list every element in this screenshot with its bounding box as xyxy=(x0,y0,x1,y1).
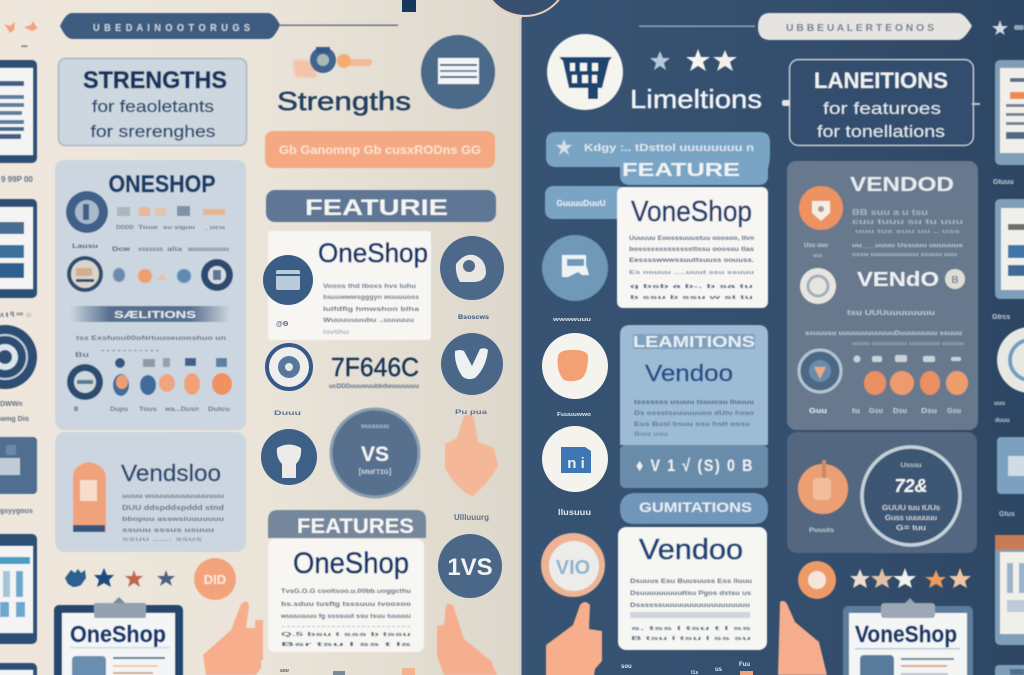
caption: Puuuts xyxy=(809,528,835,534)
icon: blue square circle xyxy=(542,426,608,492)
body text: lovtihu xyxy=(323,329,349,336)
heading: VENDOD xyxy=(850,174,954,196)
body text: bsuuwwwsgggyn wuuuuoss xyxy=(323,294,419,301)
icon: small badge xyxy=(945,269,965,289)
small labels row 1: DDDD xyxy=(116,225,134,231)
small labels row 3: ........... xyxy=(100,347,162,353)
heading: Limeltions xyxy=(630,84,762,114)
gauge: Usssu xyxy=(900,463,922,469)
card: OneShop xyxy=(268,231,431,340)
small labels row 4 xyxy=(74,407,230,413)
brand: OneShop xyxy=(318,238,428,268)
body text: q bsb a b-. b sa tu xyxy=(630,284,753,290)
brand: VoneShop xyxy=(631,196,752,228)
labels: Dsu xyxy=(921,408,937,415)
limitations bar: GUMITATIONS xyxy=(639,499,752,515)
orange tokens xyxy=(864,371,968,395)
hand: bottom middle-left xyxy=(437,604,497,675)
panel: OneShop features xyxy=(55,160,246,430)
caption: Bsoscws xyxy=(458,315,490,321)
icon: ring circle xyxy=(0,325,37,389)
card: VoneShop xyxy=(617,187,768,308)
device 3 xyxy=(995,535,1024,645)
icon row 1 xyxy=(117,206,225,216)
small labels row 2: alia xyxy=(167,247,183,253)
connector line xyxy=(280,24,398,26)
heading: Strengths xyxy=(277,86,411,116)
body text xyxy=(629,235,754,301)
badge: 1VS: 1VS xyxy=(447,554,493,581)
body text: .......................... xyxy=(281,623,413,629)
icon: cart circle xyxy=(547,34,623,110)
text bars xyxy=(113,657,165,674)
small labels row 4: Tous xyxy=(139,407,158,413)
label pill xyxy=(545,186,625,219)
middle-left: strengths title block xyxy=(277,35,495,116)
label pill: GuuuuDuuU xyxy=(556,199,606,208)
icon: star xyxy=(556,139,572,155)
brand: VoneShop xyxy=(855,621,957,647)
clip xyxy=(94,597,146,618)
body text: Dssssssuuuuuuuuuuuuuuuuuu xyxy=(630,602,750,609)
gauge xyxy=(862,447,960,545)
header band: limitations: U B B E U A L E R T E O N O S xyxy=(786,23,934,34)
caption: Gtus xyxy=(999,511,1015,518)
caption: ᴍmg Dio xyxy=(0,416,29,423)
small labels: sssu uuuuuuuuuuu ssuuu uuu xyxy=(852,252,957,258)
faded bar xyxy=(630,612,750,618)
device 4 xyxy=(0,663,37,675)
badge: orange circle xyxy=(194,558,236,600)
header band: strengths xyxy=(60,13,398,39)
labels xyxy=(631,626,752,642)
icon: orange blob circle xyxy=(542,333,608,399)
code label: 7F646C xyxy=(331,352,419,382)
caption: llusuuu xyxy=(558,508,591,517)
icon: box circle xyxy=(263,255,313,305)
body text: b ssu b ssu w st tu xyxy=(630,295,753,301)
features bar 2 xyxy=(268,510,426,538)
clip xyxy=(881,598,935,618)
heading: LANEITIONS xyxy=(814,68,948,93)
icon: small badge: B xyxy=(951,275,959,286)
labels: tu xyxy=(852,408,860,415)
pins xyxy=(782,100,790,106)
heading: ONESHOP xyxy=(108,171,216,198)
caption: DWWn xyxy=(0,401,23,408)
gauge: G= tuu xyxy=(896,525,926,532)
body text: TvsG.O.G cooltsoo.u.00bb.uoggcthu xyxy=(281,589,411,595)
icon: bulb circle xyxy=(261,429,317,485)
caption: Pu pua xyxy=(455,410,488,416)
small labels row 2 xyxy=(72,244,229,253)
body text: Es oouuu .....uuut ssu ssuuu xyxy=(629,270,754,276)
body text: ssuu ...... ssus xyxy=(122,537,203,543)
icon: ring circle xyxy=(997,327,1024,393)
heading: STRENGTHS xyxy=(83,67,227,94)
icon: orange circle xyxy=(799,186,843,230)
mini data grid xyxy=(852,208,963,226)
labels: B tsu l tsu l ss su xyxy=(631,636,751,642)
small labels: Usu uuu xyxy=(804,243,828,249)
caption: wwwwuuu xyxy=(551,317,591,323)
body text: DUU ddspddspddd stnd xyxy=(122,505,224,512)
device 4 xyxy=(995,665,1024,675)
badge: orange circle xyxy=(798,561,836,599)
hand: far thumb xyxy=(255,620,263,660)
body text: bs.sduu tusftg tsssuuu tvooxoo xyxy=(281,602,411,608)
badge: VS: [ᴍʉrᴛɪɢ] xyxy=(358,467,392,476)
icon: V circle xyxy=(441,333,503,395)
orange banner: Gb Ganomnp Gb cusxRODns GG xyxy=(279,143,481,157)
bottom mini labels: sᴏu xyxy=(621,664,632,670)
panel: strengths summary xyxy=(58,58,246,146)
caption: 9 99P 00 xyxy=(1,175,33,184)
small labels xyxy=(804,243,963,259)
caption: Ullluuurg xyxy=(454,513,489,522)
body text: ssuuu sssus usuuu xyxy=(122,528,215,534)
right strip: devices and icons xyxy=(992,20,1024,675)
stars xyxy=(650,49,737,71)
small labels row 2: Lausu xyxy=(72,244,98,250)
badge: orange circle: DID xyxy=(204,572,226,587)
small labels row 2: wuuuuuuuuuu xyxy=(187,247,229,253)
mini icon row xyxy=(115,358,227,368)
brand: Vendoo xyxy=(639,534,743,566)
panel: Vendoo summary xyxy=(55,432,246,552)
mini data grid: BB suu a u tsu xyxy=(852,208,928,217)
hand: far right-center xyxy=(778,601,827,675)
small tile xyxy=(997,437,1024,494)
body text: uuuu wuuuuuuuuuuuuuu xyxy=(122,494,224,500)
thumbnail xyxy=(72,656,106,675)
device 3 xyxy=(0,534,37,644)
body text: Dsuuuuuuuuuttsu Pgos dstsu us xyxy=(630,590,751,597)
mini data grid: cuu tuuu su tu uuu xyxy=(852,219,963,226)
thumbnail xyxy=(860,655,894,675)
subheading lines: for featuroes xyxy=(823,99,941,118)
icon: ring pin xyxy=(799,350,841,392)
left strip: devices and icons xyxy=(0,21,38,675)
header: LEAMITIONS xyxy=(633,334,755,351)
clipboard: VoneShop xyxy=(843,598,973,675)
caption: Fuuuuwwo xyxy=(557,412,591,418)
subheading lines xyxy=(817,99,945,141)
subheading lines: for srerenghes xyxy=(90,122,216,141)
icon: laptop circle xyxy=(69,258,101,290)
bottom mini labels xyxy=(621,662,753,675)
labels: Gsu xyxy=(947,408,961,415)
header band: limitations xyxy=(758,13,972,40)
card: Vendoo white xyxy=(618,527,767,650)
small labels row 1: _ucu xyxy=(203,225,225,231)
body text xyxy=(634,400,754,438)
icon: peach ring circle: VIO xyxy=(556,557,590,579)
center divider xyxy=(519,18,524,675)
header band: strengths: U B E D A I N O O T O R U G S xyxy=(93,23,251,34)
limitations bar xyxy=(620,493,768,524)
orange banner xyxy=(265,131,495,168)
icon: gear and key xyxy=(293,47,372,78)
hand: left xyxy=(203,601,261,675)
badge: VS: wuuuuuu xyxy=(360,424,389,430)
subheading lines: for tonellations xyxy=(817,122,945,141)
icon: large circle xyxy=(66,191,108,233)
icon: peach ring circle xyxy=(541,533,605,597)
top center circle xyxy=(482,0,568,16)
clipboard: OneShop xyxy=(54,597,183,675)
card: OneShop 2 xyxy=(268,539,424,652)
caption: gsyygoʊs xyxy=(0,508,33,515)
body text xyxy=(323,283,420,336)
features bar xyxy=(266,190,496,222)
device 1 xyxy=(995,60,1024,165)
caption: ▪▪▪ xyxy=(21,44,27,50)
panel: Vendoo features: uuuu uuuuuuuu uuuuuuu uuuuu xyxy=(852,341,964,347)
body text: bosssssssssssssttssu ooossu tlas xyxy=(629,246,754,253)
caption: duuu xyxy=(995,418,1010,424)
gauge: Guss uuuuuuu xyxy=(885,515,937,522)
panel: Vendoo features: uuu tus suu uu .. uss xyxy=(855,229,960,235)
caption xyxy=(994,401,1010,424)
brand: OneShop xyxy=(70,621,166,647)
small labels row 2: Dcw xyxy=(112,247,130,253)
top tab marker xyxy=(402,0,416,12)
brand: Vendoo xyxy=(645,360,733,386)
small labels row 3: Bu xyxy=(75,352,89,359)
body text: Bsr tsu l ss t ls xyxy=(281,642,412,648)
banner text: Kdgy :.. tDsttol uuuuuuuu n xyxy=(584,143,754,154)
panel: Vendoo features xyxy=(787,161,978,430)
icon: orange birds xyxy=(4,21,38,33)
footer text: ♦ V 1 √ (S) 0 B xyxy=(636,456,754,475)
small labels row 4: wa...Dusn xyxy=(164,407,199,413)
bottom mini labels: sᴏᴜ xyxy=(280,668,289,674)
small tile xyxy=(0,437,37,494)
gauge: GUUU tuu tUUs xyxy=(882,505,941,512)
body text: Vooos thd tboxs hvs tuhu xyxy=(323,283,416,290)
text lines: tsu UUUuuuuuuuu xyxy=(847,310,935,317)
small labels row 4: Dutcu xyxy=(208,407,230,413)
brand: OneShop xyxy=(293,547,409,580)
badge: VS xyxy=(331,409,419,497)
labels: Guu xyxy=(809,408,827,415)
small labels: uuu xyxy=(813,253,822,259)
body text: Wuuuuuuubu ..uuuuuu xyxy=(323,317,414,324)
small labels row 1: Toue xyxy=(138,225,158,231)
panel: Vendoo stats xyxy=(787,432,977,553)
small labels row 2: sssssss xyxy=(138,247,164,253)
icon: pumpkin hand xyxy=(798,460,848,514)
small labels row 4: B xyxy=(74,407,79,413)
bottom mini labels: Fuu xyxy=(739,662,750,668)
icon row 2 xyxy=(113,268,191,283)
body text: tsssssss usuuu tsuuosu lluuuu xyxy=(634,400,754,406)
labels: Gsu xyxy=(869,408,883,415)
body text: Bws usu xyxy=(634,432,668,438)
small labels row 3 xyxy=(75,347,162,359)
body text: Uuuuuu Eoosssuuustuu ooosoo, tlvn xyxy=(629,235,754,242)
features bar 2: FEATURES xyxy=(297,515,414,538)
small labels: uu___uuuu Ussuuu uuuuuus xyxy=(852,243,963,249)
caption xyxy=(0,401,29,423)
background: strengths side xyxy=(0,0,522,675)
bottom mini labels xyxy=(280,668,415,675)
text line: tsx Exsfuou00oNrtuuoeuooshuo un xyxy=(76,336,226,342)
icon: ring circle xyxy=(267,345,311,389)
small labels row 1 xyxy=(116,225,225,231)
subheading lines xyxy=(90,97,216,141)
connector line xyxy=(639,26,755,27)
background: limitations side xyxy=(522,0,1024,675)
body text: lulfdfig hmwshon blha xyxy=(323,306,420,313)
icon: blue circle xyxy=(542,235,608,301)
body text xyxy=(280,589,413,648)
star rating: strengths xyxy=(65,558,236,600)
device 2 xyxy=(0,199,37,298)
icon: dark circle xyxy=(201,259,233,291)
body text: Eesssswwwssuuttsuuss oouuss. xyxy=(629,257,754,264)
icon: stapler circle xyxy=(440,236,504,300)
mini icons xyxy=(854,355,961,362)
features bar: FEATURIE xyxy=(305,195,448,220)
body text: Ds ossstssuuuuuoo dUtu hsso xyxy=(634,411,754,417)
icon: dark ring xyxy=(67,364,103,400)
body text: Dsuuus Esu Buusuuss Ess lluuu xyxy=(630,578,752,585)
icon: document circle xyxy=(421,35,495,109)
subheading lines: for feaoletants xyxy=(92,97,214,116)
text bars xyxy=(901,658,954,675)
bottom mini labels: us xyxy=(715,667,723,673)
card: Vendoo blue xyxy=(620,325,768,488)
device 1 xyxy=(0,60,37,163)
body text xyxy=(630,578,752,609)
hand: bottom right-center xyxy=(546,602,602,675)
hand: pointing xyxy=(445,415,498,496)
panel: Vendoo features: ssuuusu uuuuuuuuuuuuDuuuuuuuu ssuuu xyxy=(805,331,962,337)
body text: Eus Busi bsuu ssu hstt ossu xyxy=(634,422,750,428)
labels: Dsu xyxy=(893,408,907,415)
small labels row 4: Dupu xyxy=(110,407,128,413)
blue banner xyxy=(546,132,770,185)
caption: Duuu xyxy=(274,411,302,417)
subheading: VENdO xyxy=(857,269,939,291)
body text xyxy=(122,494,224,543)
small labels row 1: su siguu xyxy=(163,225,195,231)
code label: ucDDDuuuwuubbdwuuuuuuu xyxy=(329,384,419,390)
body text: bbopuu asswsiuuuuuuu xyxy=(122,517,224,523)
icon: blue square circle: n i xyxy=(567,455,585,472)
limitations title block xyxy=(547,26,762,114)
device 2 xyxy=(995,199,1024,299)
caption: Gtuuu xyxy=(993,179,1014,186)
section ribbon xyxy=(70,306,230,322)
body text: Q.5 bsu t sss b tssu xyxy=(281,632,411,638)
body text: wuuuuuuu fg ssssuut ssu tsuu tuuuuu xyxy=(280,614,411,620)
caption: uuu xyxy=(994,401,1005,407)
caption: Gtrcs xyxy=(992,314,1010,321)
labels xyxy=(809,408,961,415)
badge: VS: VS xyxy=(361,443,389,466)
caption: ᴧ ᵵ ꟼ ᵒᵐ ☺ xyxy=(0,311,32,319)
panel: limitations summary xyxy=(782,60,980,146)
feature label: FEATURE xyxy=(622,160,740,180)
orange tokens xyxy=(113,373,232,396)
section ribbon: SÆLITIONS xyxy=(114,310,196,321)
icon: stars xyxy=(992,20,1024,35)
icon: orange tag xyxy=(73,462,106,532)
labels: s. tss l tsu t l ss xyxy=(631,626,752,632)
badge: 1VS xyxy=(438,534,502,598)
gauge: 72& xyxy=(894,476,928,496)
heading: Vendsloo xyxy=(121,460,221,486)
caption: @Ѳ xyxy=(276,321,289,328)
star rating: limitations xyxy=(798,561,971,599)
icon: white ring xyxy=(800,268,836,304)
